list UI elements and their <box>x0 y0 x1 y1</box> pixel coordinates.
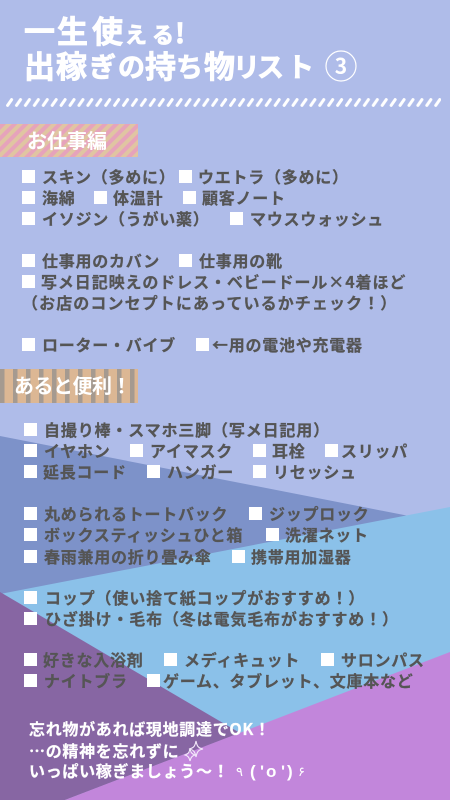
closing message: ٩ <box>236 761 243 780</box>
banner: お仕事編 <box>0 124 138 157</box>
title: 一生使 <box>24 7 123 52</box>
closing message: いっぱい稼ぎましょう～！ <box>29 758 229 782</box>
checklist: handy items: 耳栓 <box>272 438 306 462</box>
checklist: handy items <box>24 417 425 692</box>
title: 出稼 <box>24 42 87 87</box>
closing message: ('o') <box>250 762 293 781</box>
checklist: handy items: 延長コード <box>43 459 127 483</box>
banner: お仕事編: お仕事編 <box>27 125 107 154</box>
checklist: handy items: ボックスティッシュひと箱 <box>44 522 243 546</box>
checklist: work items: （お店のコンセプトにあっているかチェック！） <box>22 290 397 314</box>
checklist: handy items: 春雨兼用の折り畳み傘 <box>44 544 212 568</box>
checklist: work items: スキン（多めに） <box>42 164 176 188</box>
checklist: handy items: 自撮り棒・スマホ三脚（写メ日記用） <box>44 417 330 441</box>
checklist: handy items: ハンガー <box>167 459 234 483</box>
title: える <box>125 18 174 50</box>
checklist: handy items: ゲーム、タブレット、文庫本など <box>163 668 413 692</box>
checklist: work items: 仕事用の靴 <box>199 248 283 272</box>
checklist: handy items: スリッパ <box>341 438 408 462</box>
checklist: work items: 顧客ノート <box>202 185 286 209</box>
title: 物 <box>204 42 235 87</box>
title: 持 <box>145 42 176 87</box>
checklist: handy items: 携帯用加湿器 <box>251 544 352 568</box>
checklist: work items: マウスウォッシュ <box>250 206 384 230</box>
title: 3 <box>335 50 347 80</box>
title: リスト <box>233 46 314 85</box>
checklist: work items <box>22 164 406 356</box>
checklist: work items: ウエトラ（多めに） <box>198 164 349 188</box>
striped divider <box>6 98 441 107</box>
checklist: handy items: ひざ掛け・毛布（冬は電気毛布がおすすめ！） <box>45 606 399 630</box>
closing message <box>29 716 305 782</box>
checklist: work items: 写メ日記映えのドレス・ベビードール×4着ほど <box>41 269 406 293</box>
title <box>24 7 356 87</box>
title: ち <box>176 46 203 85</box>
title: ぎの <box>89 46 145 85</box>
checklist: handy items: 丸められるトートバック <box>44 501 228 525</box>
checklist: work items: 仕事用のカバン <box>42 248 160 272</box>
checklist: handy items: メディキュット <box>184 647 300 671</box>
checklist: handy items: 好きな入浴剤 <box>43 647 144 671</box>
checklist: handy items: コップ（使い捨て紙コップがおすすめ！） <box>45 585 365 609</box>
checklist: handy items: リセッシュ <box>273 459 357 483</box>
checklist: handy items: ナイトブラ <box>44 668 128 692</box>
checklist: handy items: イヤホン <box>44 438 111 462</box>
checklist: work items: 体温計 <box>113 185 163 209</box>
checklist: work items: ローター・バイブ <box>42 332 176 356</box>
banner: あると便利！: あると便利！ <box>14 370 131 399</box>
checklist: work items: イソジン（うがい薬） <box>42 206 210 230</box>
closing message: ۶ <box>298 761 305 780</box>
icon: sparkles <box>185 741 203 761</box>
checklist: handy items: 洗濯ネット <box>285 522 369 546</box>
checklist: handy items: ジップロック <box>269 501 370 525</box>
title: ! <box>175 12 185 51</box>
checklist: work items: 海綿 <box>42 185 76 209</box>
closing message: …の精神を忘れずに <box>29 738 179 762</box>
checklist: handy items: アイマスク <box>150 438 233 462</box>
closing message: 忘れ物があれば現地調達でOK！ <box>29 716 271 740</box>
checklist: work items: ←用の電池や充電器 <box>212 332 363 356</box>
checklist: handy items: サロンパス <box>341 647 425 671</box>
